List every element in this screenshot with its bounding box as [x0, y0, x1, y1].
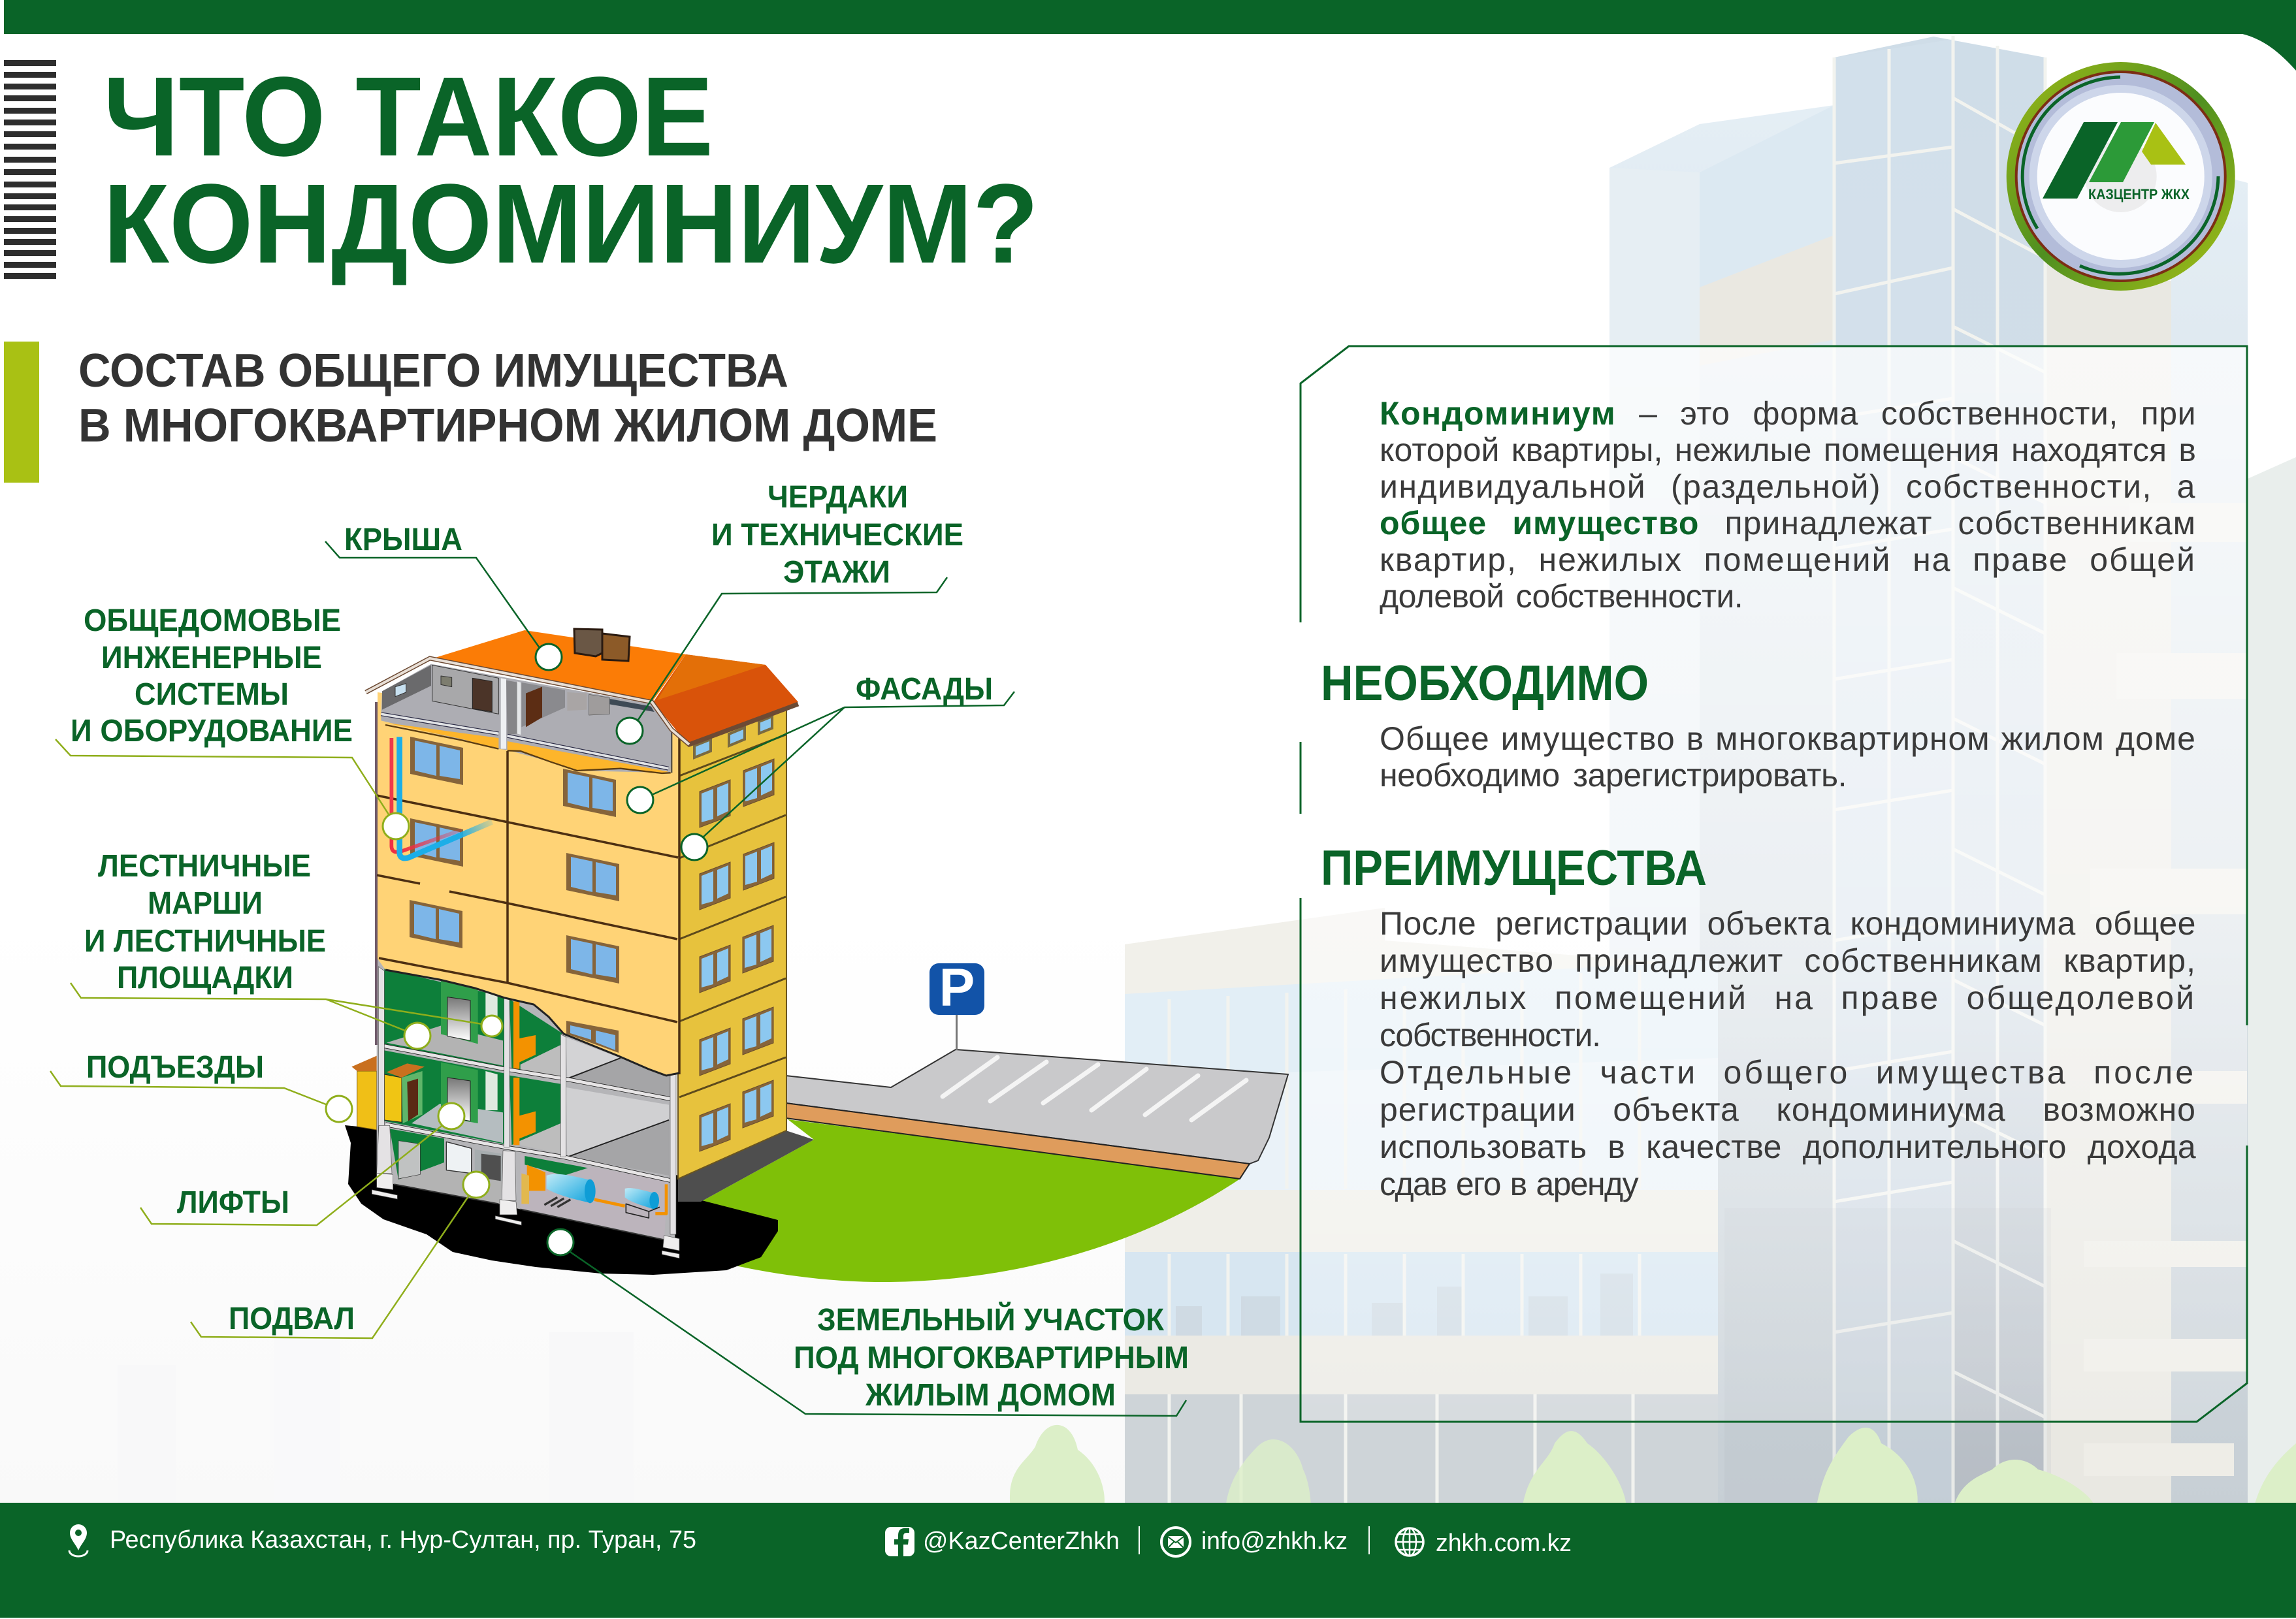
label: elevators: ЛИФТЫ [177, 1185, 289, 1220]
slabs and columns [384, 1046, 673, 1181]
label: engineering systems: СИСТЕМЫ [135, 677, 289, 712]
attic cutaway [381, 664, 671, 773]
parking sign [930, 958, 984, 1050]
text block: advantages: Отдельные части общего имущества после [1380, 1054, 2196, 1091]
roof [366, 629, 798, 745]
subtitle accent bar [4, 342, 39, 483]
upper floor walls [384, 969, 505, 1069]
logo [2007, 62, 2235, 291]
chimneys [574, 629, 602, 656]
label: facades: ФАСАДЫ [856, 672, 993, 707]
text block: advantages: использовать в качестве дополнительного дохода [1380, 1129, 2196, 1165]
subtitle: В МНОГОКВАРТИРНОМ ЖИЛОМ ДОМЕ [78, 400, 937, 452]
illustration: grass, road and parking [701, 958, 1288, 1282]
road [786, 1050, 1288, 1164]
text block: advantages: сдав его в аренду [1380, 1166, 1638, 1202]
text block: advantages: собственности. [1380, 1017, 1600, 1053]
label: stairs and landings: И ЛЕСТНИЧНЫЕ [84, 924, 326, 959]
subtitle [78, 345, 937, 452]
basement [390, 1129, 444, 1180]
text block: definition: квартир, нежилых помещений на праве общей [1380, 541, 2196, 578]
label: elevators [140, 1103, 464, 1225]
label: facades [627, 672, 1014, 860]
label: attics and technical floors: ЧЕРДАКИ [768, 480, 908, 515]
decorative stripes next to title [4, 60, 56, 279]
parking sign: P [939, 958, 975, 1018]
left wing [1609, 105, 1834, 1509]
label: attics and technical floors: ЭТАЖИ [783, 555, 890, 590]
text block: definition: долевой собственности. [1380, 578, 1743, 615]
footer: separators [1139, 1526, 1369, 1554]
text block: registration required [1380, 720, 2196, 793]
heading: advantages: ПРЕИМУЩЕСТВА [1321, 841, 1707, 896]
text block: definition: индивидуальной (раздельной) собственности, а [1380, 468, 2196, 505]
building interior cutaway [351, 958, 679, 1258]
footer: website: zhkh.com.kz [1436, 1530, 1572, 1557]
text block: definition: общее имущество принадлежат собственникам [1380, 505, 2196, 541]
trees [1010, 1425, 2296, 1509]
subtitle: СОСТАВ ОБЩЕГО ИМУЩЕСТВА [78, 345, 788, 397]
label: attics and technical floors [617, 480, 963, 744]
panel: condominium text box [1301, 346, 2247, 1422]
label: roof: КРЫША [344, 522, 462, 557]
label: stairs and landings: ПЛОЩАДКИ [117, 961, 293, 995]
far right block [2248, 457, 2296, 1509]
footer: facebook: @KazCenterZhkh [923, 1528, 1120, 1555]
label: engineering systems: ОБЩЕДОМОВЫЕ [84, 603, 341, 638]
label: engineering systems [56, 603, 409, 839]
cut band [385, 723, 498, 749]
plinth [678, 1130, 814, 1202]
ground soil [345, 1125, 778, 1275]
text block: definition: Кондоминиум – это форма собственности, при [1380, 395, 2196, 432]
side entrance box [357, 1071, 377, 1130]
label: stairs and landings [71, 849, 502, 1049]
top green bar [4, 0, 2296, 71]
footer: email: info@zhkh.kz [1201, 1528, 1348, 1555]
main tower [1834, 37, 2045, 1509]
heading: necessary: НЕОБХОДИМО [1321, 656, 1649, 711]
pipes [391, 737, 492, 858]
lower left building [1125, 908, 1718, 1509]
text block: advantages [1380, 905, 2196, 1202]
label: engineering systems: И ОБОРУДОВАНИЕ [71, 714, 353, 748]
text block: advantages: После регистрации объекта кондоминиума общее [1380, 905, 2196, 942]
label: basement: ПОДВАЛ [229, 1302, 355, 1336]
text block: advantages: регистрации объекта кондоминиума возможно [1380, 1091, 2196, 1128]
text block: registration required: необходимо зарегистрировать. [1380, 757, 1847, 793]
title: ЧТО ТАКОЕ [103, 53, 713, 180]
side wall [678, 705, 786, 1179]
text block: registration required: Общее имущество в многоквартирном жилом доме [1380, 720, 2196, 757]
title [103, 53, 1039, 287]
text block: definition: которой квартиры, нежилые помещения находятся в [1380, 432, 2196, 468]
tower right block [2045, 261, 2171, 1509]
label: stairs and landings: МАРШИ [148, 886, 263, 921]
label: attics and technical floors: И ТЕХНИЧЕСКИЕ [711, 518, 963, 553]
label: entrances [50, 1050, 352, 1122]
text block: definition [1380, 395, 2196, 615]
footer green bar [0, 1503, 2296, 1618]
label: basement [191, 1172, 489, 1338]
label: entrances: ПОДЪЕЗДЫ [86, 1050, 264, 1085]
front wall [378, 692, 679, 1076]
footer: address: Республика Казахстан, г. Нур-Султан, пр. Туран, 75 [110, 1526, 696, 1554]
illustration: apartment building [345, 629, 814, 1275]
label: engineering systems: ИНЖЕНЕРНЫЕ [101, 641, 322, 675]
middle floor walls [384, 1050, 504, 1144]
text block: advantages: нежилых помещений на праве общедолевой [1380, 980, 2196, 1016]
label: stairs and landings: ЛЕСТНИЧНЫЕ [98, 849, 311, 884]
title: КОНДОМИНИУМ? [103, 160, 1039, 287]
label: land plot: ЗЕМЕЛЬНЫЙ УЧАСТОК [817, 1302, 1165, 1338]
label: roof [325, 522, 562, 670]
label: land plot [547, 1229, 1189, 1416]
label: land plot: ПОД МНОГОКВАРТИРНЫМ [794, 1341, 1189, 1375]
text block: advantages: имущество принадлежит собственникам квартир, [1380, 942, 2196, 979]
label: land plot: ЖИЛЫМ ДОМОМ [865, 1378, 1116, 1413]
logo: КАЗЦЕНТР ЖКХ [2088, 186, 2190, 202]
